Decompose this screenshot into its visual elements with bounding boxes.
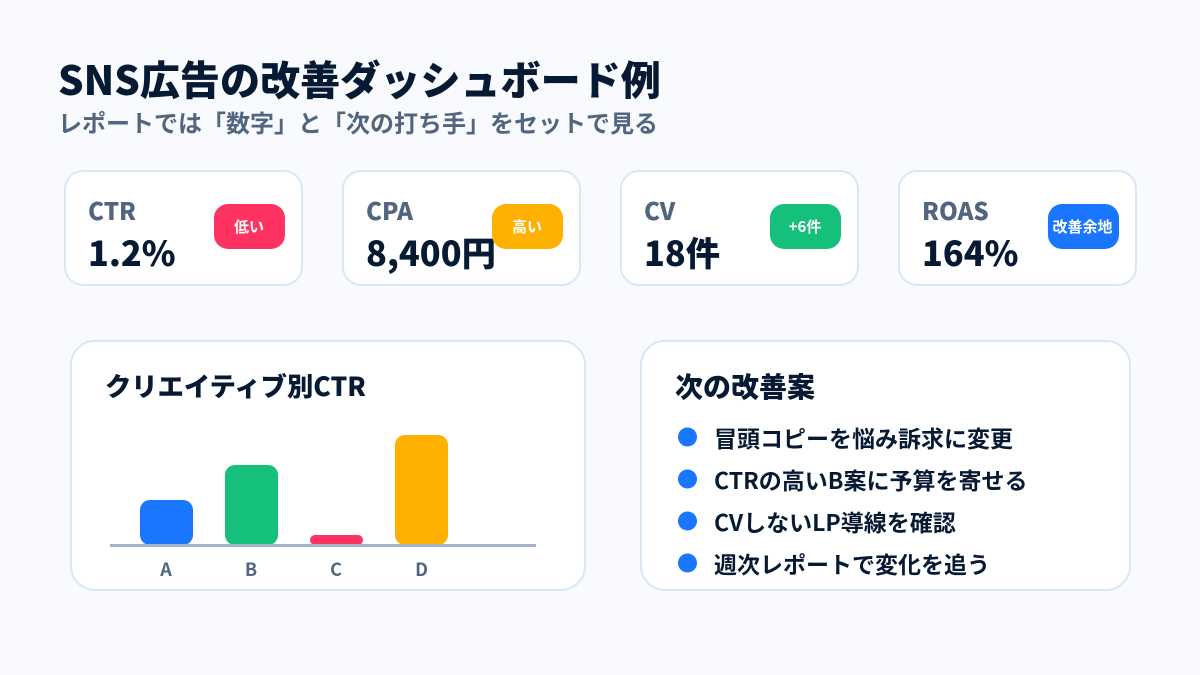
panel: ROAS card: [899, 171, 1136, 285]
value: CPA: 8,400円: [366, 226, 496, 276]
panel: CTR card: [65, 171, 302, 285]
badge: high: [492, 204, 563, 249]
badge: plus six: [770, 204, 841, 249]
bar A: [140, 500, 193, 545]
title: SNS広告の改善ダッシュボード例: [58, 48, 661, 107]
value: CV: 18件: [644, 226, 720, 276]
badge: room for improvement: 改善余地: [1052, 216, 1113, 237]
chart heading: クリエイティブ別CTR: [105, 365, 366, 404]
list item 1: 冒頭コピーを悩み訴求に変更: [714, 420, 1013, 454]
label: CV: CV: [644, 192, 676, 227]
badge: plus six: +6件: [789, 216, 821, 237]
subtitle: レポートでは「数字」と「次の打ち手」をセットで見る: [58, 104, 658, 139]
panel: next improvements: [641, 341, 1130, 590]
badge: high: 高い: [512, 216, 542, 237]
label C: C: [330, 556, 342, 582]
list item 3: CVしないLP導線を確認: [714, 504, 956, 538]
label B: B: [245, 556, 257, 582]
value: ROAS: 164%: [922, 226, 1018, 276]
panel: creative CTR chart: [71, 341, 585, 590]
list item 2: CTRの高いB案に予算を寄せる: [714, 462, 1027, 496]
label D: D: [415, 556, 428, 582]
label: CTR: CTR: [88, 192, 136, 227]
badge: room for improvement: [1048, 204, 1119, 249]
bar D: [395, 435, 448, 545]
panel heading: 次の改善案: [675, 366, 815, 406]
label: ROAS: ROAS: [922, 192, 989, 227]
badge: low: [214, 204, 285, 249]
value: CTR: 1.2%: [88, 226, 176, 276]
axis: [110, 544, 536, 547]
badge: low: 低い: [234, 216, 264, 237]
label: CPA: CPA: [366, 192, 414, 227]
bar B: [225, 465, 278, 545]
bar C: [310, 535, 363, 545]
label A: A: [159, 556, 172, 582]
list item 4: 週次レポートで変化を追う: [714, 546, 990, 580]
panel: CPA card: [343, 171, 580, 285]
panel: CV card: [621, 171, 858, 285]
bar chart: [110, 435, 536, 582]
